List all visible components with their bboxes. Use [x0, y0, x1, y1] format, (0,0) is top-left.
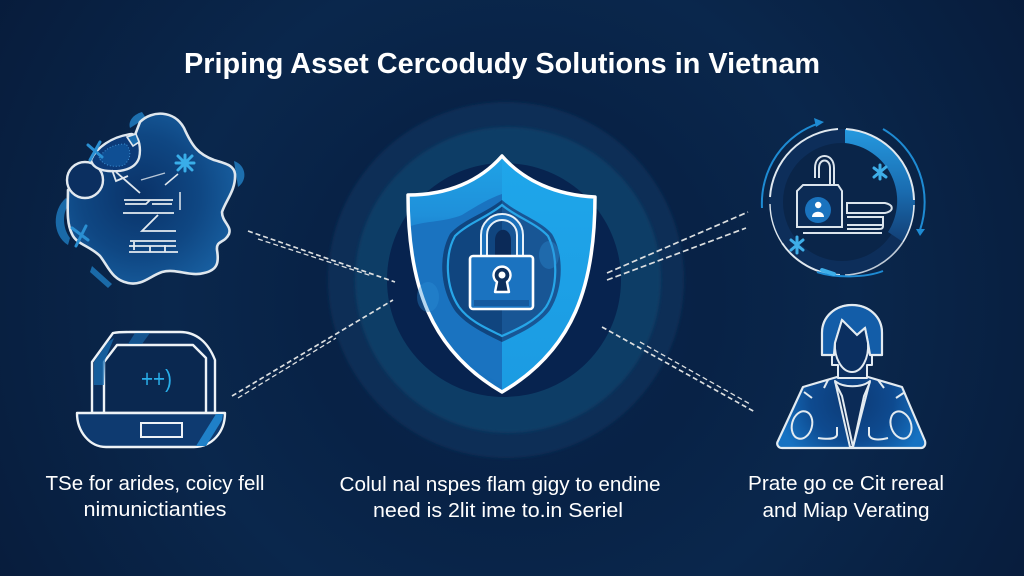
caption: centre: Colul nal nspes flam gigy to endine: [340, 474, 660, 496]
caption: left: TSe for arides, coicy fell: [46, 473, 264, 495]
document lines: [123, 173, 180, 252]
icon: top left blob document: [56, 112, 244, 288]
icon: laptop: [77, 332, 225, 447]
title: Priping Asset Cercodudy Solutions in Vietnam: [184, 48, 820, 80]
icon: person: [777, 305, 925, 448]
connector: top left to shield: [248, 231, 395, 282]
connector: bottom left to shield: [232, 300, 393, 398]
connector: top right to shield: [607, 212, 748, 280]
central shield with padlock: [408, 156, 595, 392]
concentric rings behind shield: [328, 102, 684, 458]
mesh node: [91, 134, 140, 171]
caption: centre: [340, 474, 660, 522]
open padlock: [797, 156, 892, 233]
shield inner emblem: [442, 200, 561, 342]
caption: centre: need is 2lit ime to.in Seriel: [373, 500, 623, 522]
icon: top right lock ring: [762, 118, 925, 276]
caption: right: [748, 473, 944, 522]
caption: right: and Miap Verating: [762, 500, 930, 522]
padlock: [470, 217, 533, 309]
screen glyphs: ++): [141, 365, 172, 393]
shield speckle texture: [417, 241, 559, 312]
orbit arrows: [762, 123, 925, 276]
caption: left: nimunictianties: [84, 499, 226, 521]
connector: bottom right to shield: [602, 327, 755, 412]
snowflake markers: [72, 142, 194, 246]
circle node: [67, 162, 103, 198]
caption: right: Prate go ce Cit rereal: [748, 473, 944, 495]
snowflake markers: [791, 165, 886, 274]
caption: left: [46, 473, 264, 521]
